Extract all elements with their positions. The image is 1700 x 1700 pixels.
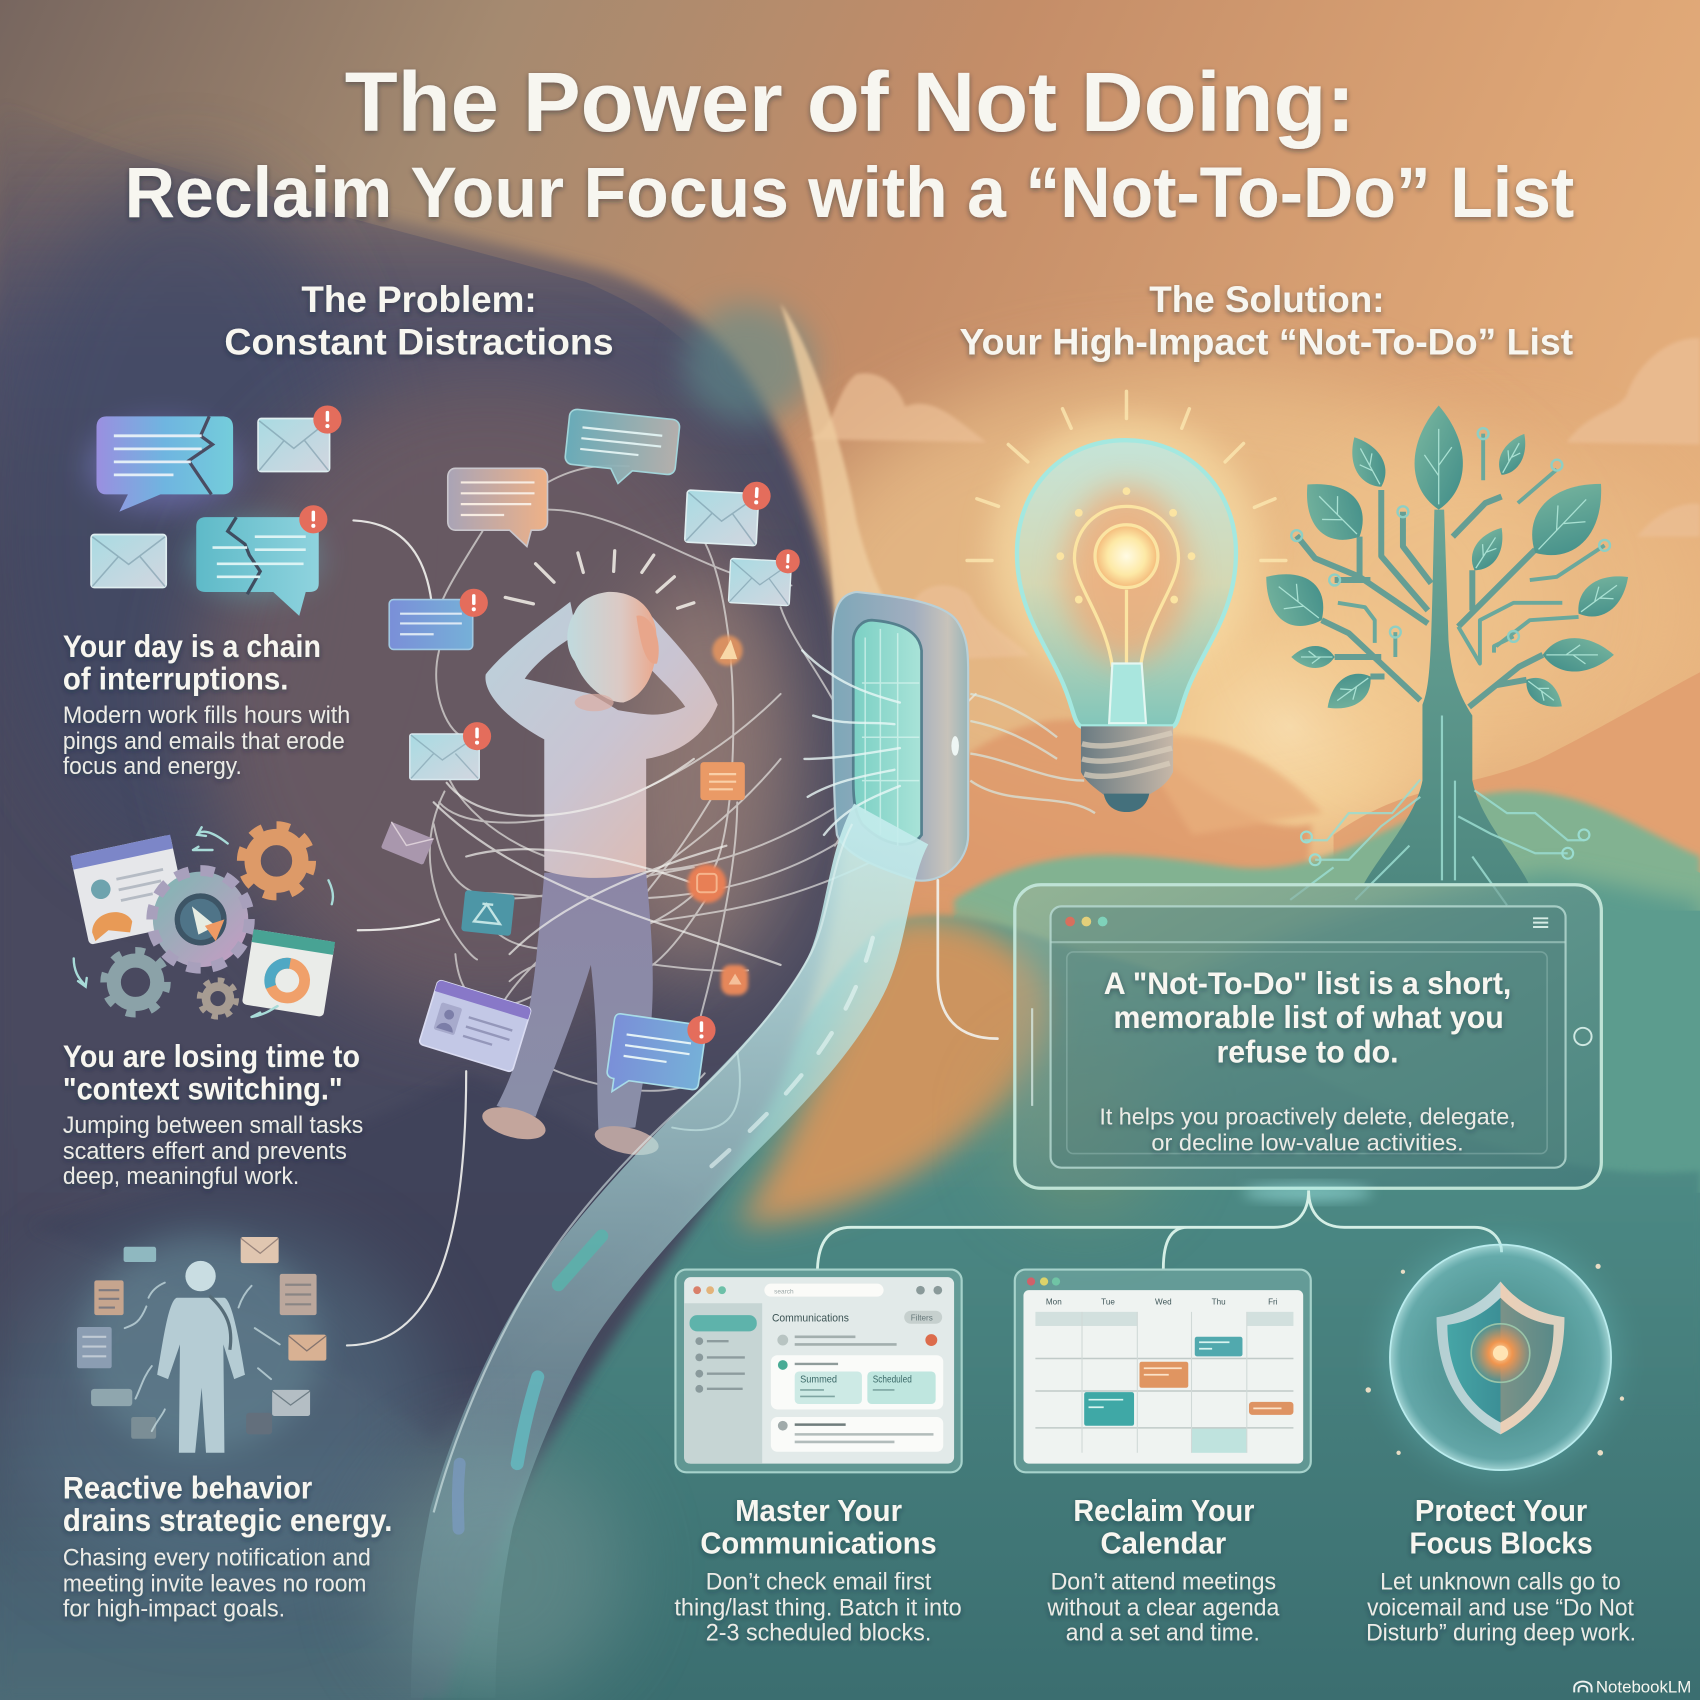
tablet text [1099, 966, 1516, 1155]
text: chain of interruptions [63, 629, 350, 780]
text: master your communications: 2-3 scheduled blocks. [706, 1619, 931, 1646]
text: chain of interruptions: Modern work fills hours with [63, 702, 350, 729]
text: context switching: "context switching." [63, 1071, 343, 1106]
orange small icon [721, 965, 748, 995]
calendar window: Mon [1046, 1297, 1062, 1306]
text: reclaim your calendar: and a set and time. [1066, 1619, 1260, 1646]
heading: the solution [960, 279, 1573, 363]
heading: the problem: Constant Distractions [224, 322, 614, 363]
text: protect your focus blocks: Protect Your [1415, 1495, 1587, 1528]
road of focus [434, 824, 891, 1698]
envelope right [728, 546, 800, 606]
small envelope muted [381, 822, 434, 865]
chat bubble: peach [448, 468, 548, 546]
orange note icon [700, 762, 745, 800]
orange play icon [712, 635, 743, 666]
tablet text: A "Not-To-Do" list is a short, [1104, 966, 1511, 1001]
communications window: Summed [800, 1374, 837, 1385]
figure: overwhelmed person [434, 551, 781, 1160]
badge lower [687, 1016, 716, 1044]
leaves [1251, 405, 1638, 719]
text: master your communications [674, 1495, 962, 1646]
calendar window: Fri [1268, 1297, 1278, 1306]
heading: the solution: Your High-Impact “Not-To-Do” List [960, 322, 1573, 363]
text: master your communications: Communications [700, 1528, 937, 1561]
envelope top right [685, 478, 771, 546]
text: reactive behavior: drains strategic energy. [63, 1503, 392, 1538]
text: chain of interruptions: pings and emails that erode [63, 728, 345, 755]
text: context switching: scatters effert and prevents [63, 1138, 347, 1165]
text: reclaim your calendar: Reclaim Your [1073, 1495, 1255, 1528]
tablet text: or decline low-value activities. [1151, 1129, 1464, 1155]
browser profile card [419, 980, 532, 1072]
heading: the problem [224, 279, 614, 363]
text: reactive behavior [63, 1470, 392, 1623]
teal app icon [461, 890, 515, 936]
communications window: Scheduled [873, 1374, 912, 1385]
text: master your communications: Don’t check email first [706, 1568, 932, 1595]
text: protect your focus blocks: Let unknown calls go to [1380, 1568, 1621, 1595]
heading: the solution: The Solution: [1149, 279, 1385, 320]
icon: fractured chat bubbles [87, 405, 342, 616]
text: protect your focus blocks: Focus Blocks [1409, 1528, 1593, 1561]
portal door [802, 592, 1095, 881]
floating notifications [381, 409, 800, 1103]
calendar window: Thu [1212, 1297, 1226, 1306]
text: reclaim your calendar: Don’t attend meetings [1051, 1568, 1276, 1595]
tangled distraction lines [430, 466, 976, 1130]
title [125, 54, 1574, 233]
notebooklm mark: NotebookLM [1596, 1678, 1691, 1696]
tablet definition panel [1015, 885, 1601, 1188]
title: Reclaim Your Focus with a “Not-To-Do” List [125, 153, 1574, 233]
circuit tree [1251, 405, 1638, 905]
tablet text: It helps you proactively delete, delegate, [1099, 1103, 1516, 1129]
communications window: search [774, 1288, 794, 1295]
chat bubble lower [605, 1013, 707, 1103]
text: reactive behavior: meeting invite leaves no room [63, 1571, 366, 1598]
title: The Power of Not Doing: [345, 54, 1355, 149]
text: context switching [63, 1039, 363, 1190]
chat bubble: teal tilted [563, 409, 680, 489]
communications window [675, 1270, 962, 1472]
text: chain of interruptions: focus and energy. [63, 753, 242, 780]
calendar window: Tue [1101, 1297, 1115, 1306]
envelope left [410, 722, 491, 780]
tablet text: refuse to do. [1216, 1034, 1399, 1069]
text: chain of interruptions: of interruptions. [63, 662, 288, 697]
icon: reactive person surrounded by items [77, 1236, 326, 1453]
heading: the problem: The Problem: [301, 279, 537, 320]
text: reactive behavior: Reactive behavior [63, 1470, 312, 1505]
text: context switching: deep, meaningful work. [63, 1163, 299, 1190]
text: chain of interruptions: Your day is a chain [63, 629, 321, 664]
communications window: Communications [772, 1313, 849, 1325]
connector lines [347, 520, 997, 1345]
text: reclaim your calendar: Calendar [1100, 1528, 1226, 1561]
tablet text: memorable list of what you [1113, 1000, 1504, 1035]
calendar window: Wed [1155, 1297, 1172, 1306]
text: protect your focus blocks: Disturb” during deep work. [1366, 1619, 1636, 1646]
orange folder icon [687, 864, 726, 903]
text: reactive behavior: for high-impact goals. [63, 1596, 285, 1623]
text: context switching: Jumping between small tasks [63, 1112, 363, 1139]
text: protect your focus blocks: voicemail and use “Do Not [1367, 1594, 1634, 1621]
text: protect your focus blocks [1366, 1495, 1636, 1646]
branching connector [817, 1184, 1502, 1268]
communications window: Filters [911, 1314, 933, 1323]
message card blue [389, 589, 488, 649]
text: master your communications: Master Your [735, 1495, 902, 1528]
text: master your communications: thing/last thing. Batch it into [674, 1594, 962, 1621]
text: context switching: You are losing time to [63, 1039, 360, 1074]
calendar window [1015, 1270, 1311, 1472]
focus shield orb [1366, 1240, 1624, 1474]
text: reactive behavior: Chasing every notification and [63, 1545, 371, 1572]
text: reclaim your calendar: without a clear agenda [1046, 1594, 1280, 1621]
icon: gears and windows [70, 826, 335, 1017]
light bulb [967, 391, 1286, 812]
text: reclaim your calendar [1046, 1495, 1280, 1646]
